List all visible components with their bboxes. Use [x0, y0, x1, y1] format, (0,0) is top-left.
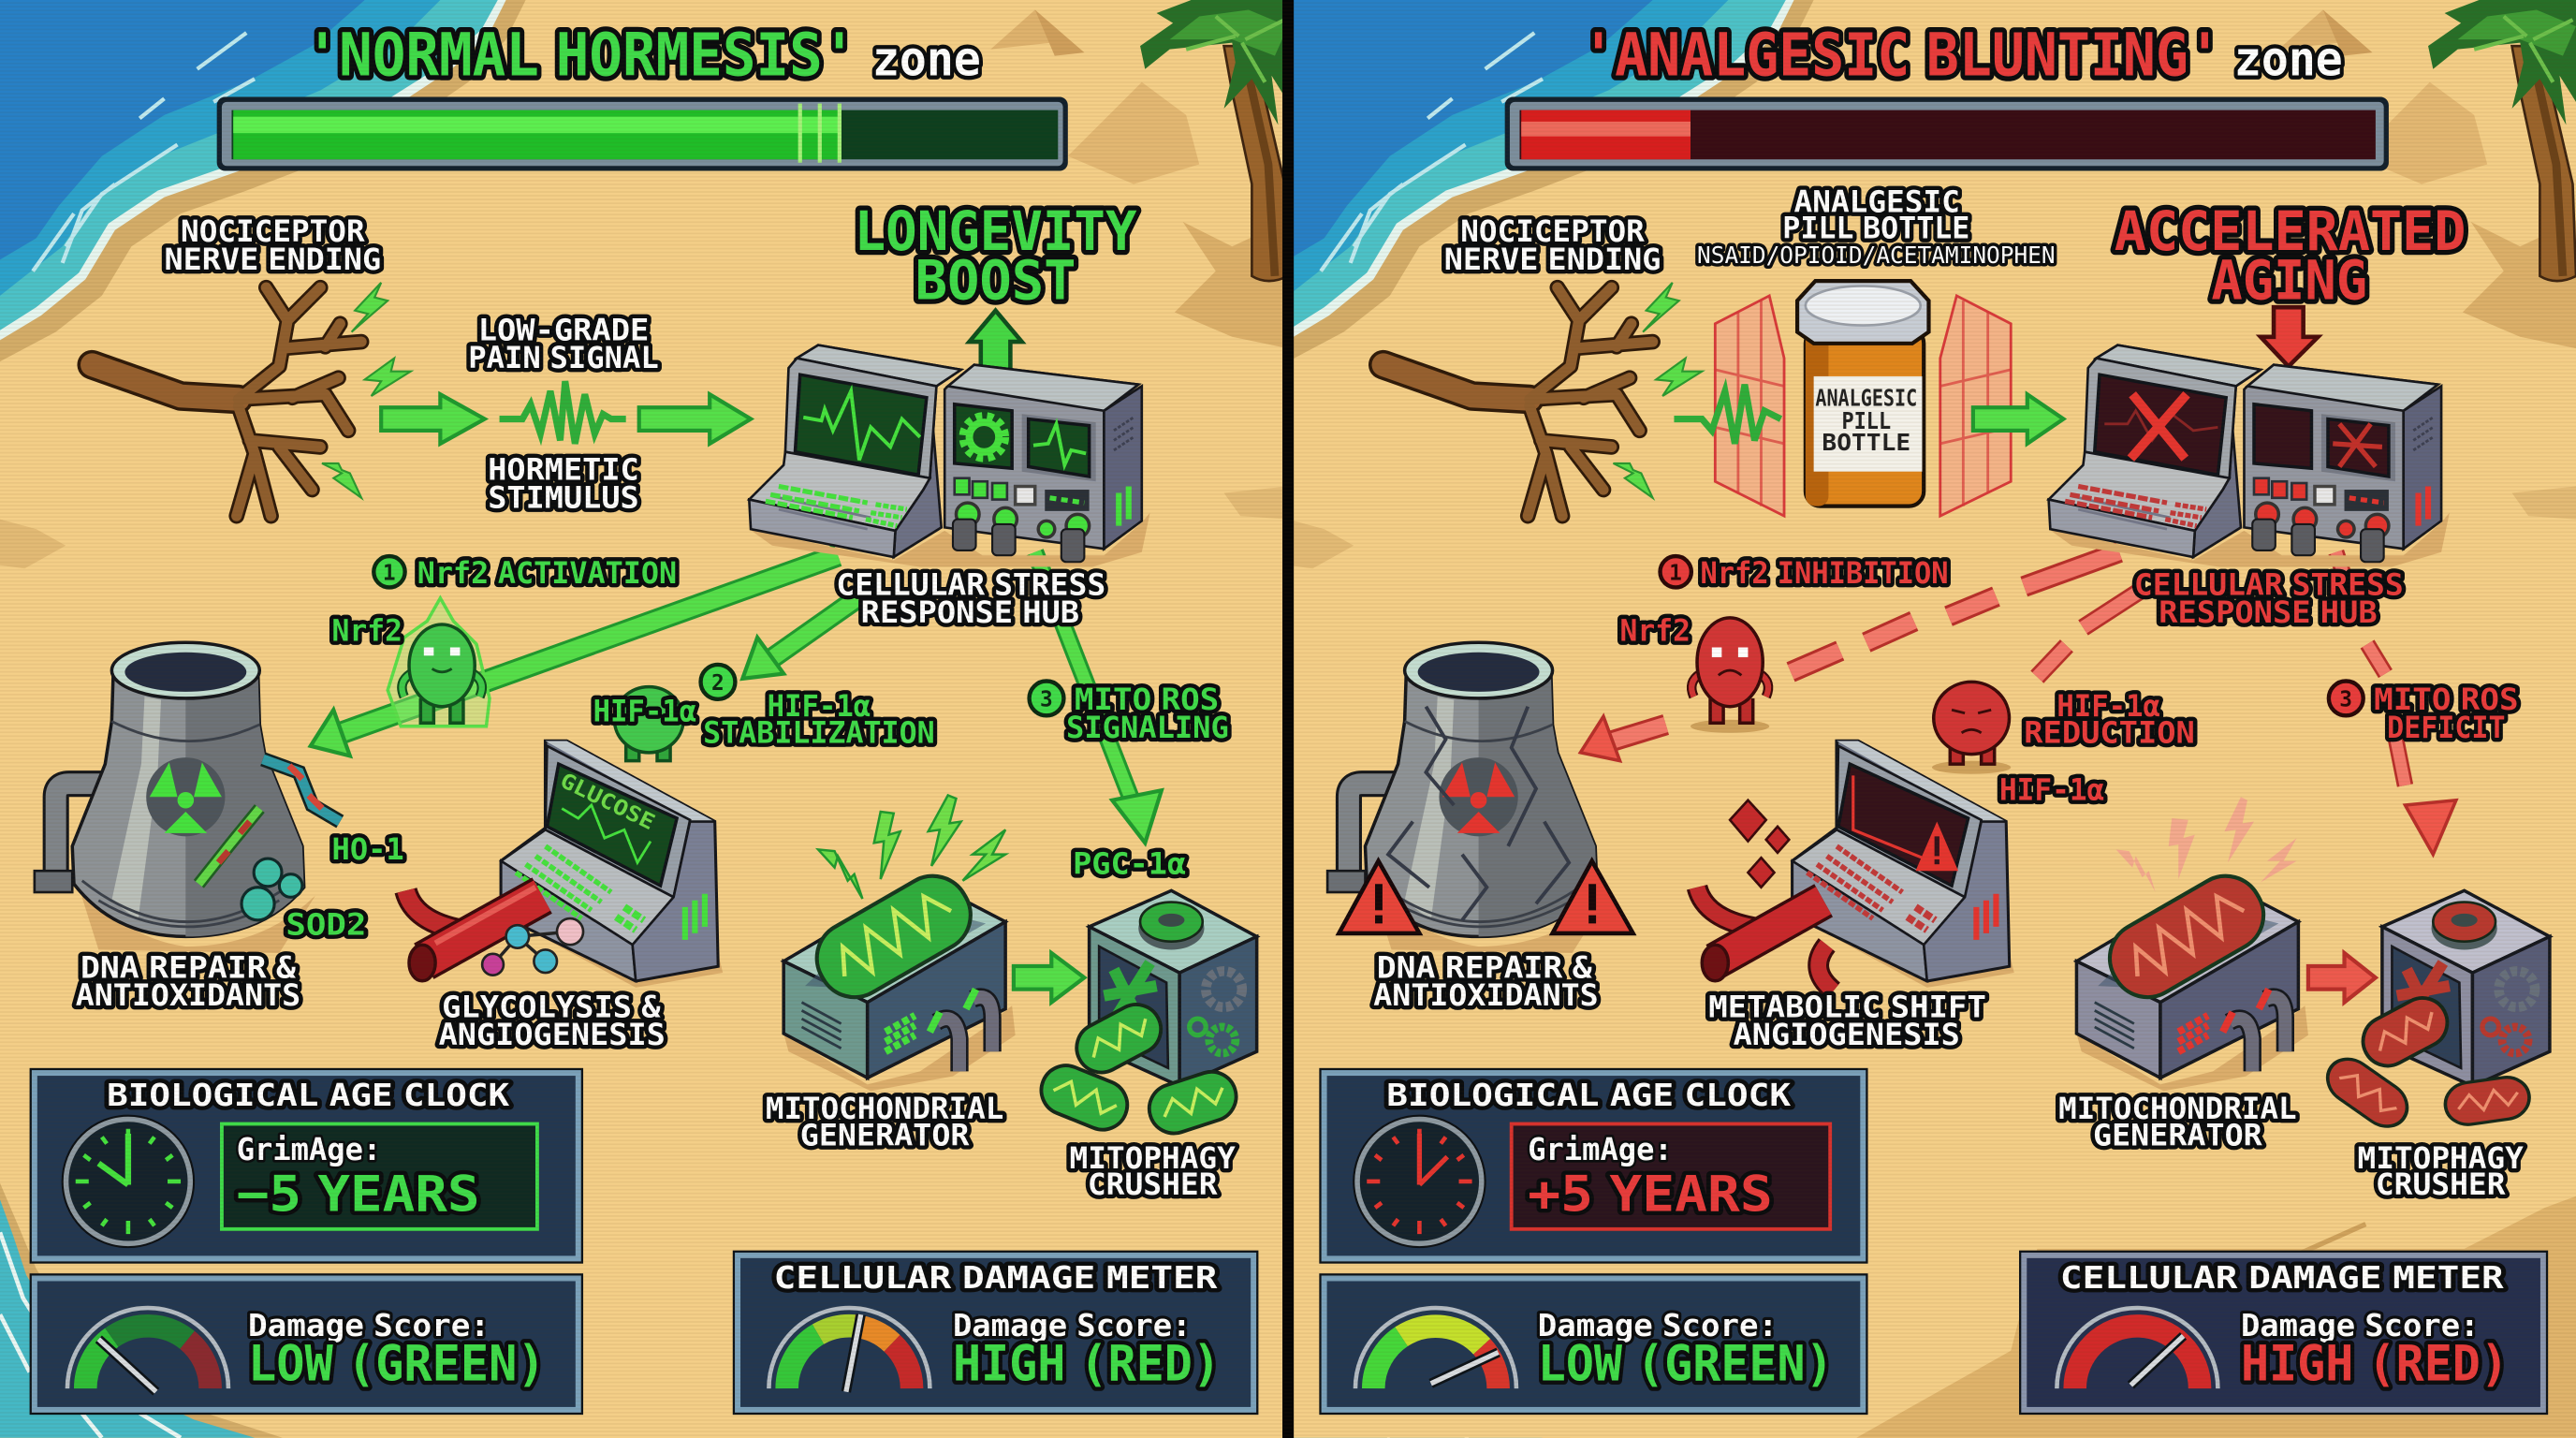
label: step 2 HIF reduction: REDUCTION	[2024, 716, 2195, 750]
heading: longevity boost: BOOST	[915, 248, 1076, 312]
title: analgesic blunting zone: zone	[2234, 33, 2343, 88]
arrow: generator to crusher	[1014, 953, 1084, 1003]
label: step 3 mito ROS signaling: SIGNALING	[1066, 712, 1229, 745]
panel: cellular damage meter: Damage Score:	[953, 1307, 1191, 1343]
machine: cellular stress hub	[749, 345, 1150, 567]
label: step 3 mito ROS deficit: 3	[2339, 688, 2352, 712]
heading: accelerated aging	[2115, 199, 2466, 312]
icon: red shield left	[1715, 296, 1784, 516]
icon: pill bottle: ANALGESIC	[1815, 385, 1917, 412]
panel: normal hormesis zone	[30, 21, 1258, 1415]
panel: damage score low: LOW (GREEN)	[1538, 1335, 1834, 1392]
GrimAge readout: GrimAge:	[1528, 1131, 1673, 1167]
background: left beach	[0, 0, 1288, 1438]
gauge low	[67, 1308, 228, 1392]
GrimAge readout	[1512, 1124, 1830, 1229]
arrow: bottle to hub	[1973, 394, 2063, 444]
label: PGC-1a: PGC-1α	[1073, 848, 1186, 882]
character: Nrf2 sad	[1690, 618, 1769, 733]
label: hub	[836, 568, 1105, 630]
label: metabolic shift	[1708, 990, 1986, 1052]
label: DNA repair: ANTIOXIDANTS	[76, 979, 300, 1013]
label: mitochondrial generator: GENERATOR	[2093, 1119, 2263, 1152]
background: right beach	[1288, 0, 2576, 1438]
label: hub: CELLULAR STRESS	[836, 568, 1105, 602]
label: low-grade pain signal	[468, 314, 659, 375]
icons: energy bolts	[818, 795, 1005, 899]
title: analgesic blunting zone: 'ANALGESIC BLUNTING'	[1582, 21, 2221, 90]
icon: pill bottle: PILL	[1841, 407, 1891, 434]
label: step 1 Nrf2 activation: 1	[383, 562, 396, 586]
label: step 3 mito ROS deficit	[2329, 682, 2519, 745]
panel: cellular damage meter high	[2019, 1251, 2548, 1415]
character: HIF-1a	[614, 687, 683, 761]
icon: nerve ending branch	[1383, 287, 1653, 516]
GrimAge readout	[222, 1124, 537, 1229]
panel: damage score low	[1319, 1273, 1868, 1415]
label: step 3 mito ROS signaling: MITO ROS	[1075, 683, 1219, 717]
clock dial	[1354, 1116, 1486, 1247]
label: DNA repair	[76, 951, 300, 1013]
arrows: dashed red hub to HIF	[2037, 592, 2139, 677]
label: glycolysis: GLYCOLYSIS &	[442, 990, 662, 1024]
label: hub: RESPONSE HUB	[861, 596, 1079, 630]
label: step 3 mito ROS signaling	[1030, 682, 1229, 745]
heading: longevity boost	[855, 199, 1137, 312]
center divider	[1282, 0, 1294, 1438]
icons: faded bolts	[2116, 797, 2297, 892]
label: mitochondrial generator	[2058, 1093, 2297, 1152]
label: DNA repair	[1373, 951, 1599, 1013]
label: DNA repair: ANTIOXIDANTS	[1373, 979, 1599, 1013]
icon: blood vessel and molecules	[406, 888, 583, 981]
label: nociceptor: NOCICEPTOR	[181, 215, 366, 249]
label: nociceptor: NERVE ENDING	[165, 243, 381, 277]
arrow: hub to Nrf2 target	[311, 555, 838, 756]
progress bar: green level	[217, 97, 1068, 171]
arrow: hub to HIF	[742, 598, 857, 679]
panel: cellular damage meter high: Damage Score:	[2241, 1307, 2479, 1343]
panel: cellular damage meter: CELLULAR DAMAGE METER	[774, 1259, 1219, 1296]
label: HIF-1a: HIF-1α	[1999, 774, 2104, 808]
machine: cracked reactor	[1327, 642, 1608, 953]
label: metabolic shift: METABOLIC SHIFT	[1708, 990, 1986, 1024]
arrow: stimulus to hub	[639, 394, 751, 444]
label: mitophagy crusher: MITOPHAGY	[2358, 1142, 2524, 1176]
label: mitochondrial generator: MITOCHONDRIAL	[766, 1093, 1003, 1126]
arrow: up to longevity	[970, 311, 1022, 372]
label: metabolic shift: ANGIOGENESIS	[1734, 1019, 1960, 1052]
panel: damage score low: Damage Score:	[1538, 1307, 1778, 1343]
label: hormetic stimulus	[488, 454, 639, 515]
panel: damage score low: LOW (GREEN)	[248, 1335, 546, 1392]
label: HO-1: HO-1	[332, 833, 404, 867]
label: mitophagy crusher: CRUSHER	[2376, 1168, 2507, 1202]
label: mitochondrial generator: MITOCHONDRIAL	[2058, 1093, 2297, 1126]
label: Nrf2: Nrf2	[1620, 615, 1690, 649]
machine: glucose computer	[501, 741, 723, 988]
label: DNA repair: DNA REPAIR &	[80, 951, 297, 985]
GrimAge readout: −5 YEARS	[237, 1167, 479, 1224]
GrimAge readout: GrimAge:	[237, 1131, 381, 1167]
arrow: generator to crusher	[2308, 953, 2376, 1003]
label: mitochondrial generator: GENERATOR	[800, 1119, 971, 1152]
label: step 1 Nrf2 activation: Nrf2 ACTIVATION	[417, 557, 677, 591]
icon: pulse wave	[500, 381, 626, 444]
panel: cellular damage meter high: CELLULAR DAMAGE METER	[2060, 1259, 2505, 1296]
panel: damage score low	[30, 1273, 583, 1415]
panel: cellular damage meter high: HIGH (RED)	[2241, 1335, 2509, 1392]
label: nociceptor: NOCICEPTOR	[1460, 215, 1646, 249]
label: mitophagy crusher: MITOPHAGY	[1070, 1142, 1236, 1176]
character: HIF-1a sad	[1932, 682, 2011, 774]
machine: mitophagy crusher	[1034, 890, 1257, 1139]
machine: cellular stress hub broken	[2049, 345, 2450, 567]
label: glycolysis	[439, 990, 666, 1052]
title: normal hormesis zone: zone	[872, 33, 981, 88]
gauge red	[2056, 1308, 2217, 1388]
machine: reactor	[35, 642, 315, 953]
label: step 2 HIF stabilization: HIF-1α	[768, 690, 871, 724]
label: step 3 mito ROS signaling: 3	[1040, 688, 1053, 712]
label: step 2 HIF stabilization	[701, 665, 935, 750]
label: analgesic pill bottle	[1697, 185, 2056, 269]
gauge mixed	[768, 1308, 929, 1392]
icon: warning right	[1553, 861, 1633, 933]
label: hormetic stimulus: HORMETIC	[488, 454, 639, 488]
label: hub: RESPONSE HUB	[2159, 596, 2378, 630]
panel: analgesic blunting zone	[1319, 21, 2550, 1415]
arrows: dashed red hub to Nrf2	[1580, 552, 2119, 761]
gauge low with needle right	[1355, 1308, 1516, 1388]
icon: sparks	[1614, 283, 1702, 498]
character: Nrf2 glowing	[388, 598, 490, 726]
GrimAge readout: +5 YEARS	[1528, 1167, 1773, 1224]
machine: glucose computer: GLUCOSE	[556, 769, 658, 835]
icon: pill bottle: BOTTLE	[1822, 429, 1910, 456]
label: step 1 Nrf2 inhibition: Nrf2 INHIBITION	[1701, 557, 1949, 591]
label: step 1 Nrf2 inhibition: 1	[1669, 562, 1682, 586]
label: nociceptor	[165, 215, 381, 277]
arrows: dashed red hub to mito	[2336, 552, 2456, 855]
machine: metabolic shift computer	[1793, 741, 2014, 988]
label: mitophagy crusher: CRUSHER	[1088, 1168, 1219, 1202]
label: hub: CELLULAR STRESS	[2134, 568, 2404, 602]
icon: warning left	[1339, 861, 1419, 933]
label: hub	[2134, 568, 2404, 630]
panel: cellular damage meter	[733, 1251, 1258, 1415]
label: low-grade pain signal: PAIN SIGNAL	[468, 342, 659, 375]
panel: biological age clock: BIOLOGICAL AGE CLOCK	[1386, 1077, 1791, 1113]
label: step 3 mito ROS deficit: DEFICIT	[2387, 712, 2506, 745]
panel: biological age clock	[1319, 1068, 1868, 1264]
icon: blunted wave	[1674, 385, 1781, 444]
label: step 2 HIF stabilization: STABILIZATION	[703, 716, 935, 750]
arrow: down from aging	[2261, 307, 2318, 366]
heading: accelerated aging: ACCELERATED	[2115, 199, 2466, 263]
progress bar: red level	[1505, 97, 2389, 171]
heading: longevity boost: LONGEVITY	[855, 199, 1137, 263]
label: low-grade pain signal: LOW-GRADE	[478, 314, 649, 347]
icon: DNA and antioxidant spheres	[198, 759, 340, 920]
label: step 2 HIF reduction	[2024, 690, 2195, 750]
label: DNA repair: DNA REPAIR &	[1377, 951, 1593, 985]
label: glycolysis: ANGIOGENESIS	[439, 1019, 666, 1052]
heading: accelerated aging: AGING	[2211, 248, 2367, 312]
label: analgesic pill bottle: ANALGESIC	[1794, 185, 1960, 219]
panel: damage score low: Damage Score:	[248, 1307, 490, 1343]
machine: mitochondrial generator	[783, 863, 1016, 1091]
label: nociceptor: NERVE ENDING	[1444, 243, 1661, 277]
title: normal hormesis zone: 'NORMAL HORMESIS'	[305, 21, 856, 90]
label: HIF-1a character: HIF-1α	[593, 696, 696, 729]
icon: sparks	[322, 283, 411, 498]
label: step 2 HIF reduction: HIF-1α	[2056, 690, 2160, 724]
icon: nerve ending branch	[92, 287, 361, 516]
label: SOD2: SOD2	[285, 909, 366, 943]
label: analgesic pill bottle: PILL BOTTLE	[1782, 213, 1969, 246]
label: mitochondrial generator	[766, 1093, 1003, 1152]
panel: cellular damage meter: HIGH (RED)	[953, 1335, 1221, 1392]
panel: biological age clock	[30, 1068, 583, 1264]
clock dial	[63, 1116, 194, 1247]
icon: blood vessel and droplets	[1697, 800, 1834, 990]
machine: jammed crusher	[2319, 890, 2550, 1136]
label: Nrf2: Nrf2	[332, 615, 402, 649]
label: mitophagy crusher	[1070, 1142, 1236, 1202]
icon: red shield right	[1940, 296, 2011, 516]
arrow: signal to stimulus	[381, 394, 485, 444]
label: step 3 mito ROS deficit: MITO ROS	[2374, 683, 2519, 717]
label: nociceptor	[1444, 215, 1661, 277]
label: mitophagy crusher	[2358, 1142, 2524, 1202]
label: analgesic pill bottle: NSAID/OPIOID/ACETAMINOPHEN	[1697, 242, 2056, 269]
panel: biological age clock: BIOLOGICAL AGE CLOCK	[107, 1077, 509, 1113]
machine: failing generator	[2076, 863, 2308, 1091]
label: hormetic stimulus: STIMULUS	[488, 481, 639, 515]
arrow: hub to PGC	[1035, 552, 1162, 843]
label: step 2 HIF stabilization: 2	[711, 671, 724, 696]
icon: pill bottle	[1797, 281, 1928, 506]
